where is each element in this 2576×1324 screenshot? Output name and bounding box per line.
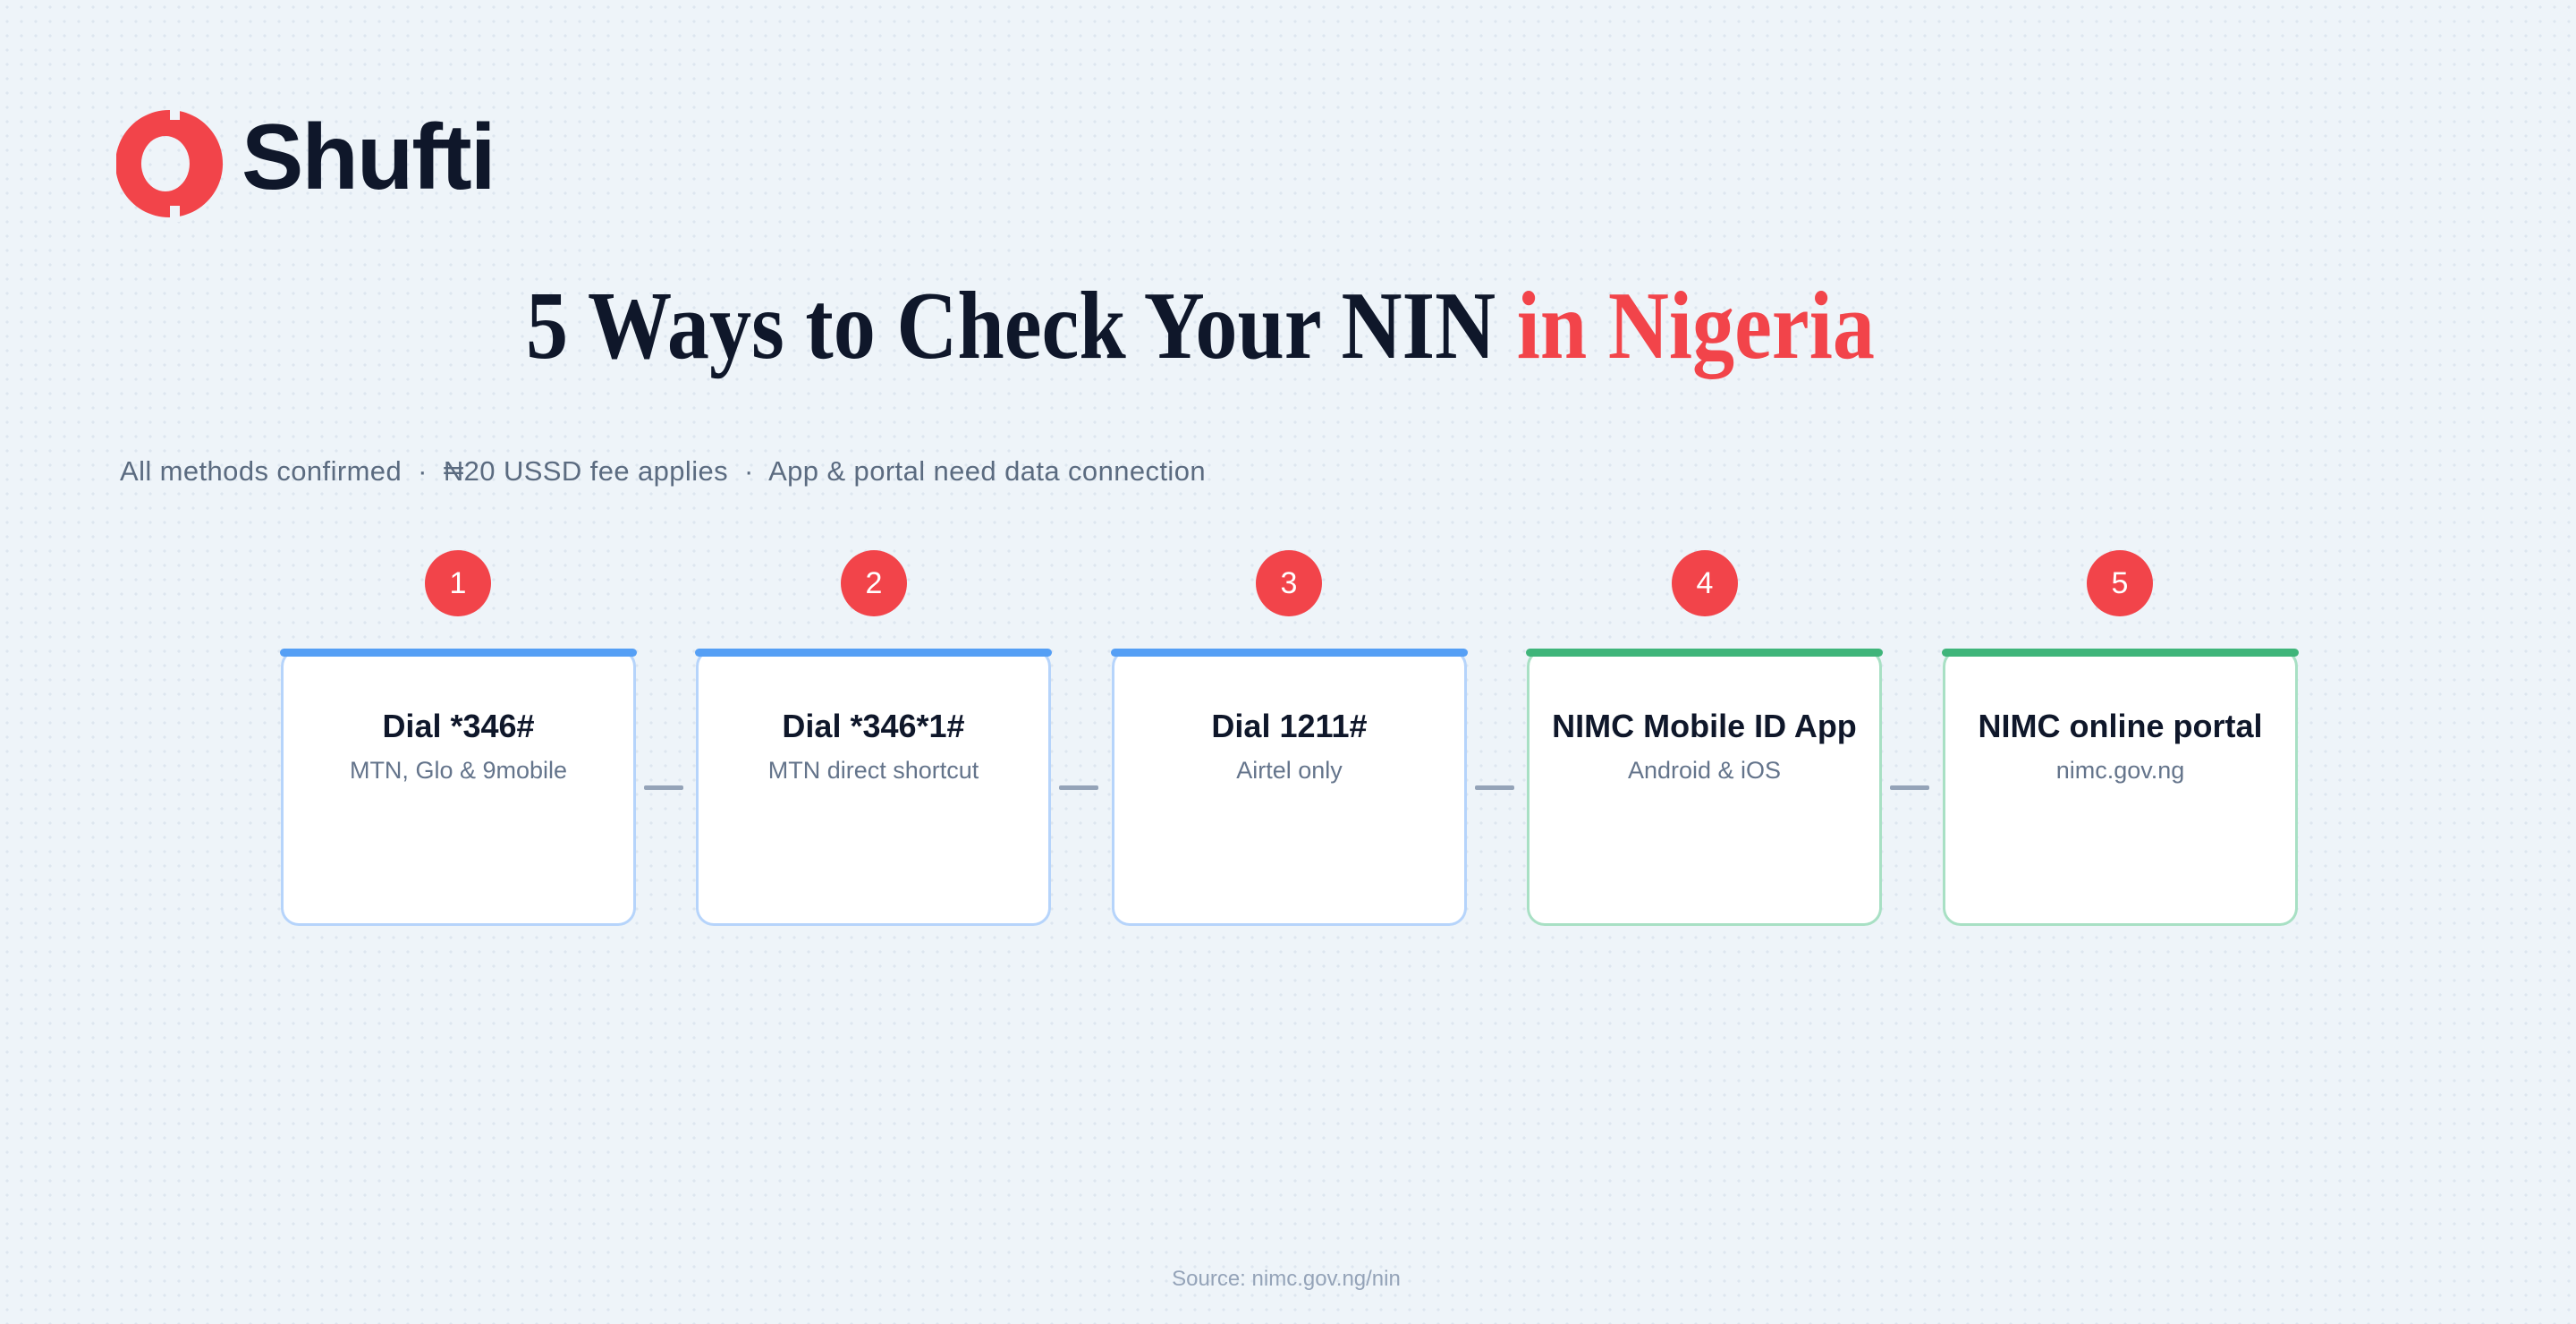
badge 4 xyxy=(1672,550,1738,616)
badge 1: 1 xyxy=(450,565,466,599)
subtitle: All methods confirmed · ₦20 USSD fee applies · App & portal need data connection xyxy=(120,455,1206,487)
card 4: NIMC Mobile ID App xyxy=(1552,708,1857,744)
card 2: MTN direct shortcut xyxy=(768,757,979,784)
card 5 xyxy=(1943,649,2298,926)
badge 1 xyxy=(425,550,491,616)
card 3: Airtel only xyxy=(1236,757,1343,784)
card 5: NIMC online portal xyxy=(1979,708,2263,744)
source: Source: nimc.gov.ng/nin xyxy=(1172,1267,1401,1291)
title: 5 Ways to Check Your NIN in Nigeria xyxy=(526,273,1875,379)
icon: logo ring xyxy=(116,106,224,222)
badge 2 xyxy=(841,550,907,616)
card 5: nimc.gov.ng xyxy=(2056,757,2184,784)
connector 3 xyxy=(1475,785,1514,790)
connector 4 xyxy=(1890,785,1929,790)
card 1 xyxy=(281,649,636,926)
card 1: MTN, Glo & 9mobile xyxy=(350,757,567,784)
card 1: Dial *346# xyxy=(382,708,535,744)
logo xyxy=(116,106,495,222)
card 4: Android & iOS xyxy=(1628,757,1781,784)
card 3: Dial 1211# xyxy=(1211,708,1368,744)
badge 4: 4 xyxy=(1697,565,1713,599)
card 4 xyxy=(1527,649,1882,926)
badge 2: 2 xyxy=(866,565,882,599)
badge 5 xyxy=(2087,550,2153,616)
card 2: Dial *346*1# xyxy=(782,708,965,744)
logo text: Shufti xyxy=(242,106,495,209)
badge 5: 5 xyxy=(2112,565,2128,599)
connector 1 xyxy=(644,785,683,790)
card 2 xyxy=(696,649,1051,926)
badge 3: 3 xyxy=(1281,565,1297,599)
card 3 xyxy=(1112,649,1467,926)
connector 2 xyxy=(1059,785,1098,790)
badge 3 xyxy=(1256,550,1322,616)
